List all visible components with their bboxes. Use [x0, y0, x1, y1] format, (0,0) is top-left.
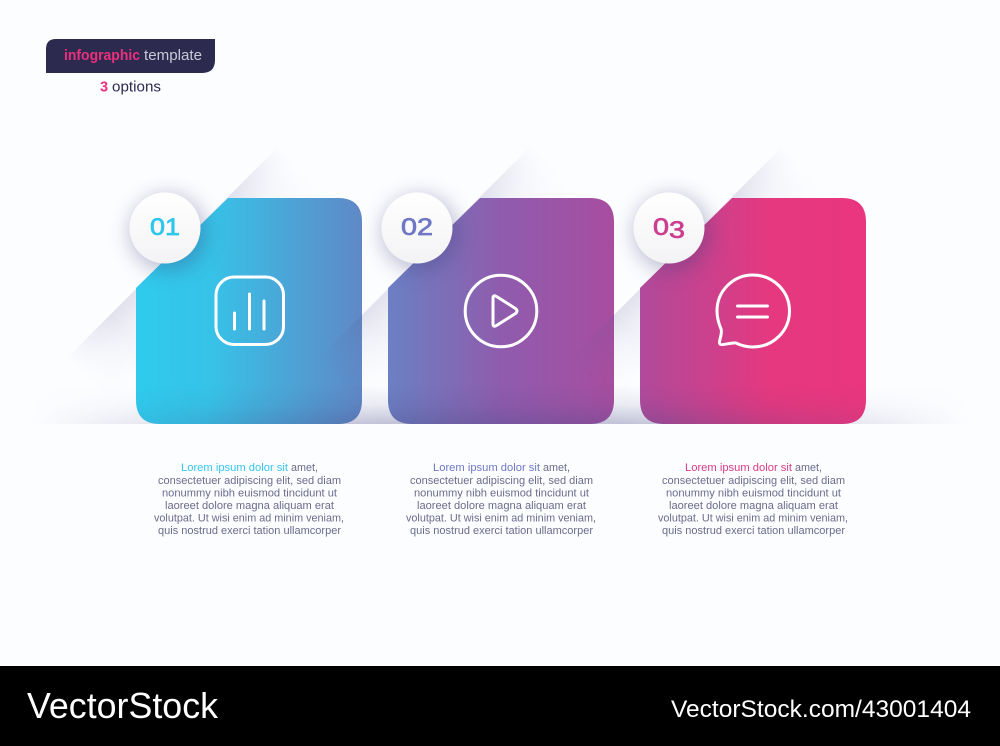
shadow: option 3	[598, 160, 774, 348]
number badge 02: 02	[401, 214, 433, 241]
text block: option 2	[406, 462, 596, 537]
icon: chat bubble	[717, 275, 790, 347]
footer logo: VectorStock	[27, 685, 219, 726]
header text: infographic	[64, 48, 140, 64]
text block: option 1: consectetuer adipiscing elit, sed diam	[158, 475, 341, 487]
card: option 2	[388, 198, 614, 424]
text block: option 2: amet,	[543, 462, 570, 474]
text block: option 3: amet,	[795, 462, 822, 474]
footer url: VectorStock.com/43001404	[671, 696, 971, 723]
shadow: option 1	[80, 160, 270, 350]
text block: option 3: laoreet dolore magna aliquam erat	[669, 500, 838, 512]
card: option 3	[640, 198, 866, 424]
number badge 01: 01	[150, 214, 180, 241]
text block: option 1: quis nostrud exerci tation ullamcorper	[158, 525, 341, 537]
card: option 1	[136, 198, 362, 424]
shadow: option 2	[358, 160, 522, 348]
floor shadow	[75, 394, 925, 424]
footer bar	[0, 666, 1000, 746]
text block: option 3	[658, 462, 848, 537]
number badge 03	[634, 192, 710, 271]
text block: option 3: quis nostrud exerci tation ullamcorper	[662, 525, 845, 537]
icon: bar chart	[216, 277, 284, 344]
options subtitle: options	[112, 80, 161, 96]
text block: option 3: consectetuer adipiscing elit, sed diam	[662, 475, 845, 487]
text block: option 2: volutpat. Ut wisi enim ad minim veniam,	[406, 512, 596, 524]
text block: option 1: volutpat. Ut wisi enim ad minim veniam,	[154, 512, 344, 524]
icon: play	[465, 275, 537, 347]
number badge 03: 0	[653, 214, 666, 241]
text block: option 1: laoreet dolore magna aliquam erat	[165, 500, 334, 512]
text block: option 3: Lorem ipsum dolor sit	[685, 462, 792, 474]
text block: option 2: nonummy nibh euismod tincidunt ut	[414, 488, 589, 500]
header pill	[46, 39, 215, 73]
text block: option 1: Lorem ipsum dolor sit	[181, 462, 288, 474]
header label	[46, 39, 215, 96]
number badge 02	[382, 192, 458, 271]
text block: option 1: nonummy nibh euismod tincidunt ut	[162, 488, 337, 500]
number badge 03: 3	[669, 217, 685, 244]
text block: option 2: laoreet dolore magna aliquam erat	[417, 500, 586, 512]
number badge 01	[130, 192, 206, 271]
text block: option 3: nonummy nibh euismod tincidunt ut	[666, 488, 841, 500]
text block: option 1: amet,	[291, 462, 318, 474]
text block: option 2: quis nostrud exerci tation ullamcorper	[410, 525, 593, 537]
text block: option 1	[154, 462, 344, 537]
options subtitle: 3	[100, 80, 108, 96]
text block: option 2: Lorem ipsum dolor sit	[433, 462, 540, 474]
header text: template	[144, 48, 202, 64]
text block: option 3: volutpat. Ut wisi enim ad minim veniam,	[658, 512, 848, 524]
text block: option 2: consectetuer adipiscing elit, sed diam	[410, 475, 593, 487]
